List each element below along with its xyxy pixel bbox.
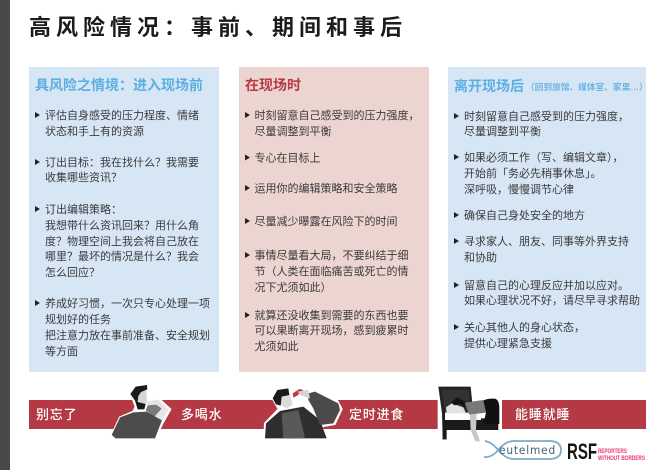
- panel: before entering the scene: [29, 67, 219, 372]
- bullet list: after: 和协助: [464, 250, 497, 264]
- bullet list: on the scene: 事情尽量看大局，不要纠结于细: [254, 248, 408, 262]
- bullet list: before: 评估自身感受的压力程度、情绪: [45, 108, 199, 122]
- bullet list: before: 收集哪些资讯？: [45, 170, 122, 184]
- bullet list: before: 养成好习惯，一次只专心处理一项: [45, 296, 210, 310]
- illustration: man eating: [264, 388, 342, 439]
- bullet list: on the scene: 就算还没收集到需要的东西也要: [254, 308, 408, 322]
- title: 高风险情况：事前、期间和事后: [29, 15, 407, 40]
- bullet list: on the scene: 尤须如此: [254, 339, 298, 353]
- logo: eutelmed: [484, 441, 561, 459]
- banner label: drink water: 多喝水: [181, 407, 222, 422]
- bullet list: after: 如果必须工作（写、编辑文章），: [464, 150, 624, 164]
- banner label: eat on time: 定时进食: [349, 407, 404, 422]
- bullet list: after: 尽量调整到平衡: [464, 124, 541, 138]
- logo: RSF: REPORTERS: [598, 449, 627, 455]
- subheading: places: （回到旅馆、媒体室、家里…）: [526, 81, 648, 92]
- bullet list: on the scene: 节（人类在面临痛苦或死亡的情: [254, 264, 408, 278]
- bullet list: after: 如果心理状况不好，请尽早寻求帮助: [464, 293, 640, 307]
- bullet list: before: [35, 108, 210, 358]
- bullet list: after: [454, 109, 640, 350]
- illustration: man drinking water: [112, 385, 170, 439]
- panel: after leaving the scene: [448, 67, 648, 372]
- bullet list: after: 寻求家人、朋友、同事等外界支持: [464, 234, 629, 248]
- panel: on the scene: [239, 67, 429, 372]
- bullet list: on the scene: [245, 108, 420, 353]
- bullet list: on the scene: 况下尤须如此）: [254, 280, 332, 294]
- logo: RSF: RSF: [567, 439, 597, 464]
- reminder banner: [29, 400, 646, 429]
- heading: after: 离开现场后: [454, 78, 524, 94]
- bullet list: on the scene: 尽量减少曝露在风险下的时间: [254, 214, 398, 228]
- bullet list: after: 关心其他人的身心状态，: [464, 320, 585, 334]
- banner label: sleep: 能睡就睡: [515, 407, 570, 422]
- bullet list: before: 规划好的任务: [45, 312, 111, 326]
- heading: on the scene: 在现场时: [245, 77, 301, 93]
- bullet list: before: 状态和手上有的资源: [45, 124, 144, 138]
- bullet list: after: 深呼吸，慢慢调节心律: [464, 183, 574, 196]
- left edge band: [0, 0, 10, 470]
- bullet list: before: 订出编辑策略：: [45, 202, 122, 216]
- bullet list: on the scene: 时刻留意自己感受到的压力强度，: [254, 108, 420, 122]
- bullet list: after: 确保自己身处安全的地方: [464, 208, 585, 222]
- bullet list: before: 哪里？最坏的情况是什么？我会: [45, 249, 199, 263]
- bullet list: after: 留意自己的心理反应并加以应对。: [464, 278, 629, 292]
- bullet list: after: 提供心理紧急支援: [464, 336, 552, 350]
- illustration: person asleep on bed: [438, 385, 501, 441]
- bullet list: before: 订出目标：我在找什么？我需要: [45, 155, 199, 169]
- logo: RSF: [567, 439, 645, 464]
- bullet list: after: 开始前「务必先稍事休息」。: [464, 166, 602, 180]
- bullet list: before: 我想带什么资讯回来？用什么角: [45, 218, 199, 232]
- bullet list: before: 度？物理空间上我会将自己放在: [45, 234, 199, 248]
- heading: before: 具风险之情境：进入现场前: [35, 77, 203, 93]
- logo: RSF: WITHOUT BORDERS: [598, 456, 645, 462]
- bullet list: on the scene: 尽量调整到平衡: [254, 124, 332, 138]
- bullet list: after: 时刻留意自己感受到的压力强度，: [464, 109, 629, 123]
- bullet list: before: 把注意力放在事前准备、安全规划: [45, 328, 210, 342]
- bullet list: before: 等方面: [45, 344, 78, 358]
- bullet list: before: 怎么回应？: [45, 265, 100, 279]
- bullet list: on the scene: 专心在目标上: [254, 150, 320, 164]
- bullet list: on the scene: 可以果断离开现场，感到疲累时: [254, 323, 408, 337]
- logo: eutelmed: eutelmed: [499, 443, 556, 457]
- bullet list: on the scene: 运用你的编辑策略和安全策略: [254, 181, 398, 195]
- banner label: don't forget: 别忘了: [36, 407, 77, 422]
